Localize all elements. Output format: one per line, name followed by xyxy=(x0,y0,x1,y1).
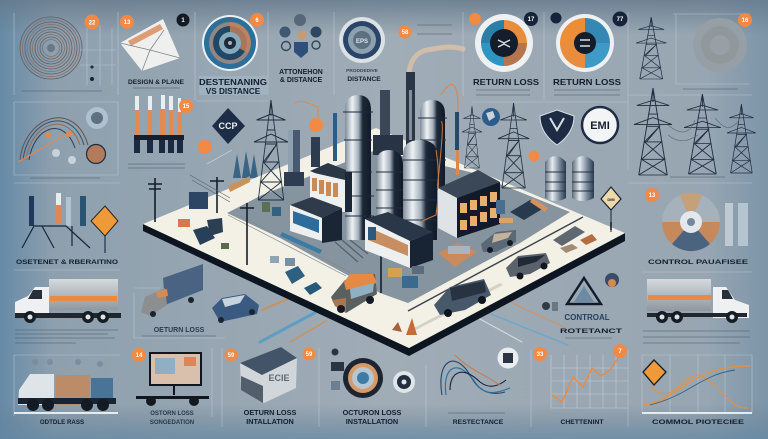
panel: reel installation xyxy=(331,348,415,426)
panel: equipment left xyxy=(14,183,120,270)
panel: distance gauge: EPS xyxy=(356,39,368,45)
panel: monitor xyxy=(132,348,212,426)
panel: monitor: 14 xyxy=(136,353,143,359)
panel: cabinet installation: INTALLATION xyxy=(246,417,294,426)
panel: insulators xyxy=(128,95,193,168)
panel: return loss dial 1: RETURN LOSS xyxy=(473,78,540,87)
panel: attenuation icons: ATTONEHON xyxy=(279,69,323,76)
panel: return loss dial 1 xyxy=(463,12,628,102)
panel: control wheel: 13 xyxy=(649,193,656,199)
panel: top-right tower: 16 xyxy=(742,18,749,24)
panel: cabinet installation: OETURN LOSS xyxy=(244,408,296,417)
panel: equipment left: OSETENET & RBERAITINO xyxy=(16,259,118,266)
panel: cabinet installation: 59 xyxy=(306,352,313,358)
panel: reel installation: INSTALLATION xyxy=(346,417,398,426)
building: left xyxy=(310,163,352,212)
panel: top-right tower xyxy=(628,12,752,183)
panel: transmission towers row xyxy=(634,88,756,177)
panel: top-left spiral xyxy=(14,12,118,175)
panel: attenuation icons: & DISTANCE xyxy=(280,77,322,84)
machinery on platform xyxy=(178,176,597,295)
panel: control wheel: CONTROL PAUAFISEE xyxy=(648,259,749,266)
icon: CCP diamond xyxy=(212,108,245,144)
sign: diamond xyxy=(601,187,621,232)
line chart: 33 xyxy=(537,352,544,358)
panel: cable arc left xyxy=(18,107,108,178)
van and car xyxy=(134,264,259,338)
panel: circular attenuation gauge: 6 xyxy=(255,18,259,24)
building: right xyxy=(438,170,500,238)
icon: EMI badge xyxy=(582,107,618,143)
panel: monitor: OSTORN LOSS xyxy=(150,411,194,417)
panel: restectance cables: RESTECTANCE xyxy=(453,419,504,426)
panel: distance gauge: DISTANCE xyxy=(347,76,381,83)
panel: reel installation: OCTURON LOSS xyxy=(343,408,402,417)
sign: diamond: DMI xyxy=(607,197,615,202)
panel: cabinet installation: ECIE xyxy=(268,373,290,383)
vehicle: sedan 2 xyxy=(506,253,550,280)
line chart: 7 xyxy=(618,349,622,355)
panel: distance gauge: 58 xyxy=(402,30,409,36)
panel: warning and control: ROTETANCT xyxy=(560,328,623,335)
panel: design envelope: DESIGN & PLANE xyxy=(128,79,185,86)
mid right towers xyxy=(462,103,529,188)
panel: insulators: 15 xyxy=(183,104,190,110)
panel: return loss dial 2: RETURN LOSS xyxy=(553,78,622,87)
panel: top-left spiral: 22 xyxy=(89,20,96,26)
curves chart xyxy=(642,355,752,426)
panel: return loss dial 2 xyxy=(550,12,628,95)
factory: rear columns xyxy=(343,72,459,240)
panel: circular attenuation gauge xyxy=(195,12,268,101)
panel: cabinet installation: 59 xyxy=(228,353,235,359)
traffic cones on platform xyxy=(392,318,417,335)
icon: CCP diamond: CCP xyxy=(218,121,238,131)
truck: right white xyxy=(642,272,752,343)
curves chart: COMMOL PIOTECIEE xyxy=(652,419,745,426)
panel: monitor: SONGEDATION xyxy=(150,420,194,426)
panel: design envelope: 13 xyxy=(124,20,131,26)
truck: left white xyxy=(15,279,121,343)
vehicle: sedan 1 xyxy=(481,230,516,253)
panel: return loss dial 2: 77 xyxy=(617,17,624,23)
poles on platform xyxy=(148,175,611,293)
vehicle: orange truck xyxy=(331,274,377,313)
panel: bottom truck xyxy=(14,355,120,426)
panel: restectance cables xyxy=(426,348,531,427)
vehicle: SUV xyxy=(434,279,491,317)
panel: attenuation icons xyxy=(279,12,334,95)
badges near tower xyxy=(198,101,323,178)
factory: silver tanks xyxy=(373,135,438,240)
panel: distance gauge xyxy=(339,17,452,83)
platform xyxy=(143,128,625,356)
panel: return loss dial 1: 17 xyxy=(528,17,535,23)
panel: circular attenuation gauge: DESTENANING xyxy=(199,78,267,87)
van and car: OETURN LOSS xyxy=(154,327,205,334)
central tower xyxy=(254,100,288,200)
icon: EMI badge: EMI xyxy=(590,120,610,132)
conduits on floor xyxy=(260,298,568,345)
line chart xyxy=(533,344,628,427)
panel: cabinet installation xyxy=(222,347,319,427)
line chart: CHETTENINT xyxy=(560,419,604,426)
panel: design envelope: 1 xyxy=(181,18,185,24)
smoke plume xyxy=(409,47,463,72)
panel: bottom truck: ODTDLE RASS xyxy=(40,419,84,426)
panel: control wheel xyxy=(645,188,749,266)
panel: distance gauge: PRODDEDIVE xyxy=(346,68,379,74)
panel: warning and control: CONTROAL xyxy=(564,313,610,322)
tanks xyxy=(528,150,594,201)
building: central xyxy=(365,212,433,268)
panel: design envelope xyxy=(120,14,190,88)
icon: shield xyxy=(540,110,574,145)
panel: circular attenuation gauge: VS DISTANCE xyxy=(206,87,261,96)
small column and masts xyxy=(284,113,337,186)
panel: warning and control xyxy=(542,273,623,338)
building: lower left xyxy=(280,197,342,254)
